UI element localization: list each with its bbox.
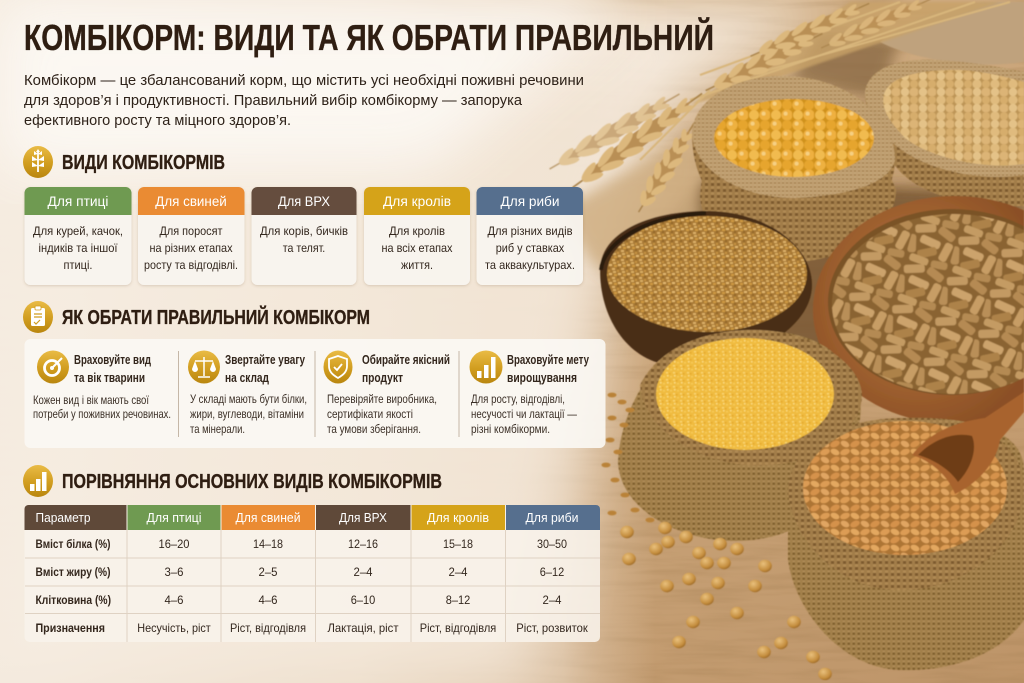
row: fibre: [36, 593, 562, 607]
panel: feed type cards: [24, 187, 583, 285]
card: rabbits: на всіх етапах: [382, 241, 452, 255]
row: fat: 2–5: [258, 565, 278, 579]
card: cattle: та телят.: [283, 241, 325, 255]
card: pigs: [138, 187, 244, 285]
row: fibre: Клітковина (%): [36, 593, 111, 607]
table header: Для риби: [526, 510, 578, 525]
row: fibre: 6–10: [351, 593, 376, 607]
step: purpose: несучості чи лактації —: [471, 407, 577, 421]
step: quality: сертифікати якості: [327, 407, 413, 421]
step: purpose: вирощування: [507, 371, 577, 385]
row: fat: 3–6: [164, 565, 184, 579]
icon: shield: [324, 350, 352, 384]
row: fat: 2–4: [354, 565, 373, 579]
table header: [24, 505, 600, 530]
row: fat: 6–12: [540, 565, 565, 579]
dark bowl: crumbled feed: [600, 211, 812, 366]
row: protein: 12–16: [348, 537, 378, 551]
section heading: types: ВИДИ КОМБІКОРМІВ: [62, 152, 225, 174]
section heading: how to choose: [23, 301, 370, 333]
card: cattle: [252, 187, 356, 285]
step: animal type and age: [33, 350, 171, 421]
row: protein: Вміст білка (%): [36, 537, 110, 551]
card: pigs: на різних етапах: [150, 241, 232, 255]
card: poultry: птиці.: [64, 258, 92, 272]
intro paragraph: [24, 73, 584, 129]
card: pigs: Для свиней: [155, 193, 227, 209]
row: purpose: Лактація, ріст: [328, 621, 399, 635]
icon: wheat ear: [23, 146, 53, 178]
table header: Для ВРХ: [339, 510, 387, 525]
shadow region behind the produce: [640, 180, 1024, 360]
step: quality: та умови зберігання.: [327, 422, 421, 436]
card: pigs: росту та відгодівлі.: [144, 258, 238, 272]
card: rabbits: [364, 187, 470, 285]
row: fat: [36, 565, 565, 579]
section heading: how to choose: ЯК ОБРАТИ ПРАВИЛЬНИЙ КОМБІКОРМ: [62, 305, 370, 329]
card: rabbits: Для кролів: [389, 224, 445, 238]
card: rabbits: Для кролів: [383, 193, 451, 209]
step: animal type and age: потреби у поживних речовинах.: [33, 407, 171, 421]
table header: Для свиней: [236, 510, 300, 525]
row: purpose: Несучість, ріст: [137, 621, 211, 635]
step: animal type and age: Враховуйте вид: [74, 353, 151, 367]
step: purpose: Враховуйте мету: [507, 353, 589, 367]
row: purpose: Ріст, відгодівля: [420, 621, 496, 635]
icon: scales: [188, 350, 220, 384]
intro paragraph: ефективного росту та міцного здоров’я.: [24, 113, 291, 129]
section heading: types: [23, 146, 225, 178]
scattered soybeans: [602, 393, 832, 680]
row: protein: 15–18: [443, 537, 473, 551]
row: purpose: Ріст, розвиток: [516, 621, 588, 635]
step: purpose: Для росту, відгодівлі,: [471, 392, 565, 406]
step: purpose: різні комбікорми.: [471, 422, 550, 436]
step: purpose: [470, 350, 589, 436]
table header: Для птиці: [146, 510, 202, 525]
card: fish: та аквакультурах.: [485, 258, 575, 272]
card: fish: [476, 187, 583, 285]
step: quality: Обирайте якісний: [362, 353, 450, 367]
table header: Для кролів: [427, 510, 489, 525]
comparison table: [24, 505, 600, 642]
row: protein: 16–20: [158, 537, 190, 551]
card: pigs: Для поросят: [160, 224, 223, 238]
row: protein: 14–18: [253, 537, 283, 551]
card: poultry: індиків та іншої: [38, 241, 118, 255]
sack: cornmeal: [618, 330, 862, 541]
step: animal type and age: Кожен вид і вік мають свої: [33, 393, 150, 407]
row: fibre: 4–6: [258, 593, 278, 607]
step: composition: на склад: [225, 371, 269, 385]
burlap sack: background top right: [880, 2, 1024, 65]
step: composition: жири, вуглеводи, вітаміни: [190, 407, 304, 421]
step: quality: Перевіряйте виробника,: [327, 392, 437, 406]
row: protein: 30–50: [537, 537, 567, 551]
section heading: comparison: [23, 465, 442, 497]
wheat ears: [543, 0, 1010, 219]
table header: Параметр: [36, 510, 90, 525]
step: quality: [324, 350, 450, 436]
card: fish: риб у ставках: [496, 241, 564, 255]
wooden scoop: [912, 392, 1024, 494]
row: purpose: Призначення: [36, 621, 105, 635]
card: fish: Для риби: [500, 193, 560, 209]
step: composition: У складі мають бути білки,: [190, 392, 307, 406]
card: rabbits: життя.: [401, 258, 433, 272]
section heading: comparison: ПОРІВНЯННЯ ОСНОВНИХ ВИДІВ КОМБІКОРМІВ: [62, 471, 442, 493]
sack: corn: [692, 76, 896, 262]
row: protein: [36, 537, 567, 551]
panel: how to choose steps: [24, 339, 606, 448]
icon: bars: [470, 350, 502, 384]
step: composition: Звертайте увагу: [225, 353, 305, 367]
card: cattle: Для корів, бичків: [260, 224, 348, 238]
step: animal type and age: та вік тварини: [74, 371, 145, 385]
card: poultry: Для курей, качок,: [33, 224, 123, 238]
row: purpose: [36, 621, 588, 635]
photo: grain sacks and bowls: [543, 0, 1024, 680]
card: fish: Для різних видів: [488, 224, 572, 238]
intro paragraph: Комбікорм — це збалансований корм, що містить усі необхідні поживні речовини: [24, 73, 584, 89]
icon: bar chart: [23, 465, 53, 497]
row: fibre: 2–4: [542, 593, 562, 607]
sack: soybeans: [865, 60, 1024, 206]
row: fibre: 4–6: [164, 593, 184, 607]
step: composition: [188, 350, 307, 436]
title: КОМБІКОРМ: ВИДИ ТА ЯК ОБРАТИ ПРАВИЛЬНИЙ: [24, 16, 714, 58]
wooden bowl: pellets: [813, 196, 1024, 424]
row: purpose: Ріст, відгодівля: [230, 621, 306, 635]
row: fat: Вміст жиру (%): [36, 565, 110, 579]
card: cattle: Для ВРХ: [278, 193, 331, 209]
icon: clipboard: [23, 301, 53, 333]
intro paragraph: для здоров’я і продуктивності. Правильний вибір комбікорму — запорука: [24, 93, 523, 109]
row: fibre: 8–12: [446, 593, 471, 607]
soft tan haze behind wheat: [560, 130, 700, 300]
step: quality: продукт: [362, 371, 403, 385]
step: composition: та мінерали.: [190, 422, 245, 436]
card: poultry: [24, 187, 132, 285]
row: fat: 2–4: [448, 565, 468, 579]
card: poultry: Для птиці: [48, 193, 108, 209]
sack: wheat grain: [788, 418, 1024, 670]
icon: target: [37, 350, 69, 384]
